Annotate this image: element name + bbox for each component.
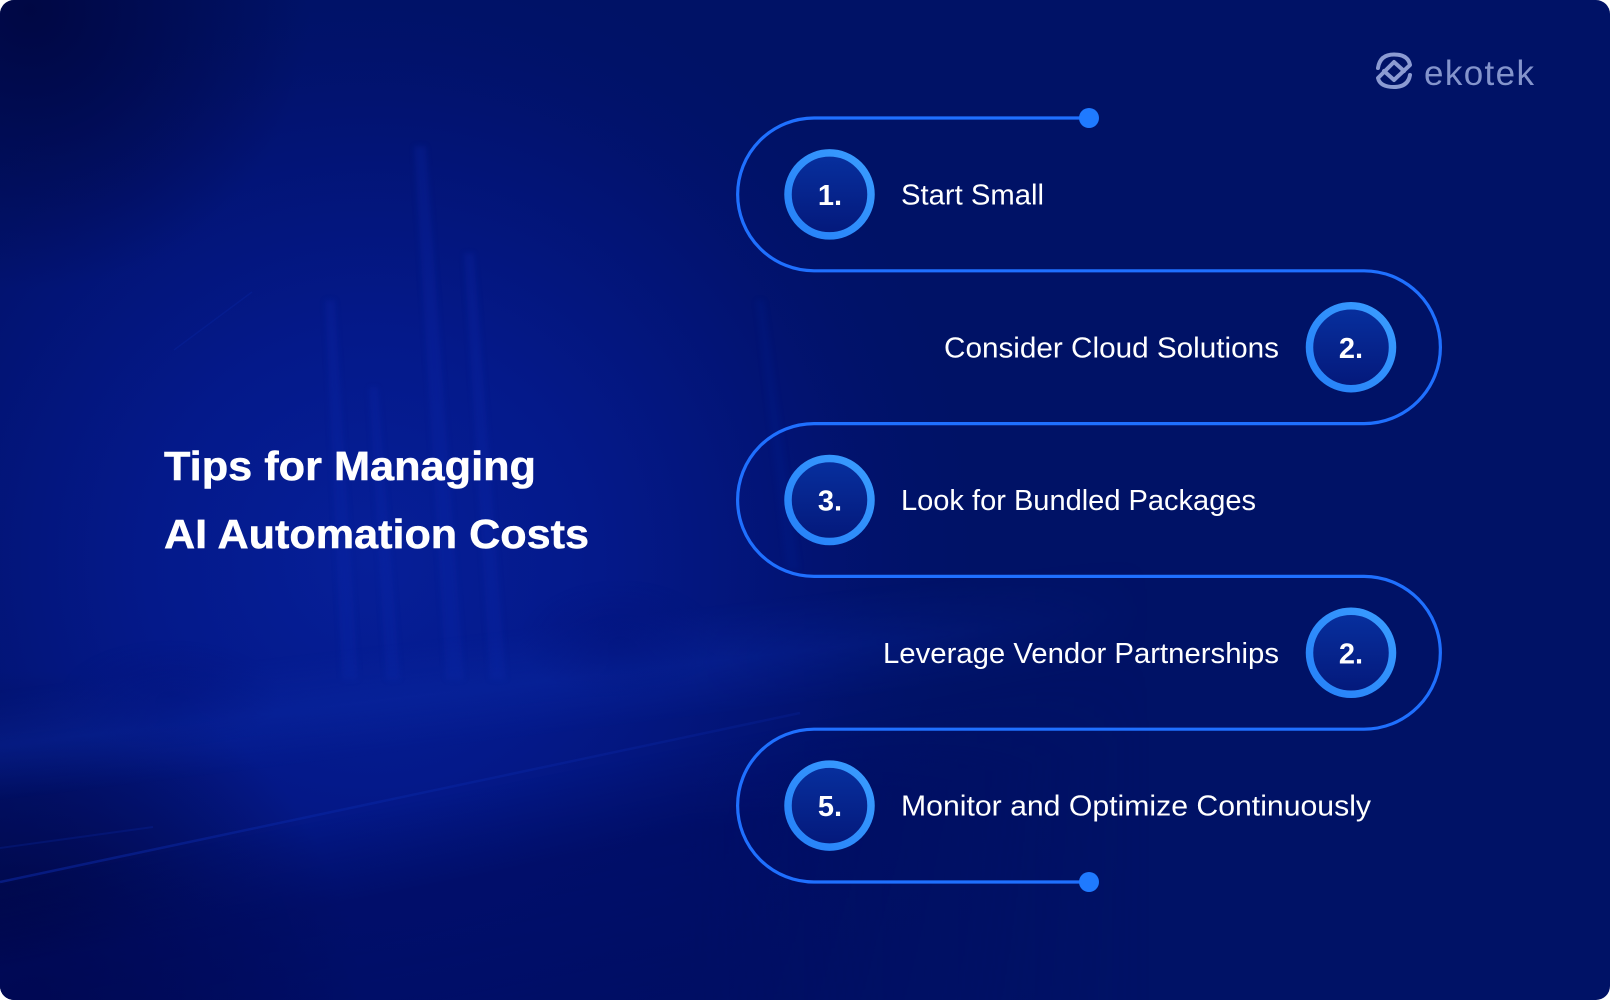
number badge 2 bbox=[1310, 306, 1392, 389]
label 4: Leverage Vendor Partnerships bbox=[883, 638, 1279, 670]
serpentine connector line bbox=[738, 118, 1440, 882]
label 3: Look for Bundled Packages bbox=[901, 485, 1256, 517]
title bbox=[164, 443, 589, 557]
label 2: Consider Cloud Solutions bbox=[944, 332, 1279, 364]
number badge 4 bbox=[1310, 611, 1392, 694]
icon: ekotek mark bbox=[1378, 54, 1410, 87]
number badge 5 bbox=[788, 764, 871, 847]
label 5: Monitor and Optimize Continuously bbox=[901, 791, 1372, 823]
label 1: Start Small bbox=[901, 180, 1044, 212]
step 2: Consider Cloud Solutions bbox=[944, 306, 1392, 389]
number badge 1 bbox=[788, 153, 871, 236]
step 4: Leverage Vendor Partnerships bbox=[883, 611, 1392, 694]
number badge 2: 2. bbox=[1339, 333, 1363, 365]
title: Tips for Managing bbox=[164, 443, 536, 489]
step 5: Monitor and Optimize Continuously bbox=[788, 764, 1372, 847]
number badge 4: 2. bbox=[1339, 638, 1363, 670]
number badge 3 bbox=[788, 458, 871, 542]
number badge 5: 5. bbox=[818, 791, 842, 823]
start dot bbox=[1079, 108, 1099, 128]
step 1: Start Small bbox=[788, 153, 1044, 236]
end dot bbox=[1079, 872, 1099, 892]
logo: ekotek bbox=[1378, 54, 1534, 93]
number badge 1: 1. bbox=[818, 180, 842, 212]
number badge 3: 3. bbox=[818, 486, 842, 518]
title: AI Automation Costs bbox=[164, 511, 589, 557]
wordmark: ekotek bbox=[1424, 54, 1534, 93]
step 3: Look for Bundled Packages bbox=[788, 458, 1256, 542]
